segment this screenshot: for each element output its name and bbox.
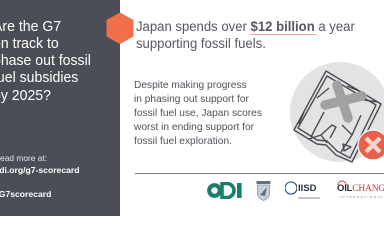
text: body paragraph: fossil fuel exploration. [134,135,232,147]
icon: grey circle [290,62,384,162]
logo mark: IISD ring [285,181,297,195]
text: body paragraph: in phasing out support for [134,93,249,105]
text: body paragraph [134,79,262,147]
icon: red cross badge [357,130,384,160]
text: body paragraph: Despite making progress [134,79,247,91]
heading: Japan spends: supporting fossil fuels. [136,36,265,51]
heading: Japan spends: Japan spends over $12 billion a year [136,19,354,34]
icon: crossed map [290,62,384,163]
logo: NRDC shield [256,181,270,201]
mark: grey X on map [325,85,362,118]
heading: question [0,18,91,104]
text: body paragraph: fossil fuel use, Japan scores [134,107,262,119]
map outline [294,71,381,162]
logo: Oil Change International [337,180,384,199]
logo mark: red gear arc [337,180,347,185]
divider [135,173,384,174]
underline: $12 billion [250,34,316,35]
text: body paragraph: worst in ending support for [134,121,254,133]
icon: orange hexagon [106,12,134,44]
logo tagline: INTERNATIONAL [340,195,384,199]
logo: ODI [207,182,242,199]
logo tagline rule [298,197,320,199]
panel: left sidebar [0,0,120,216]
heading: Japan spends [136,19,355,51]
logo text: IISD: IISD [298,183,316,194]
logo: IISD [285,181,320,199]
